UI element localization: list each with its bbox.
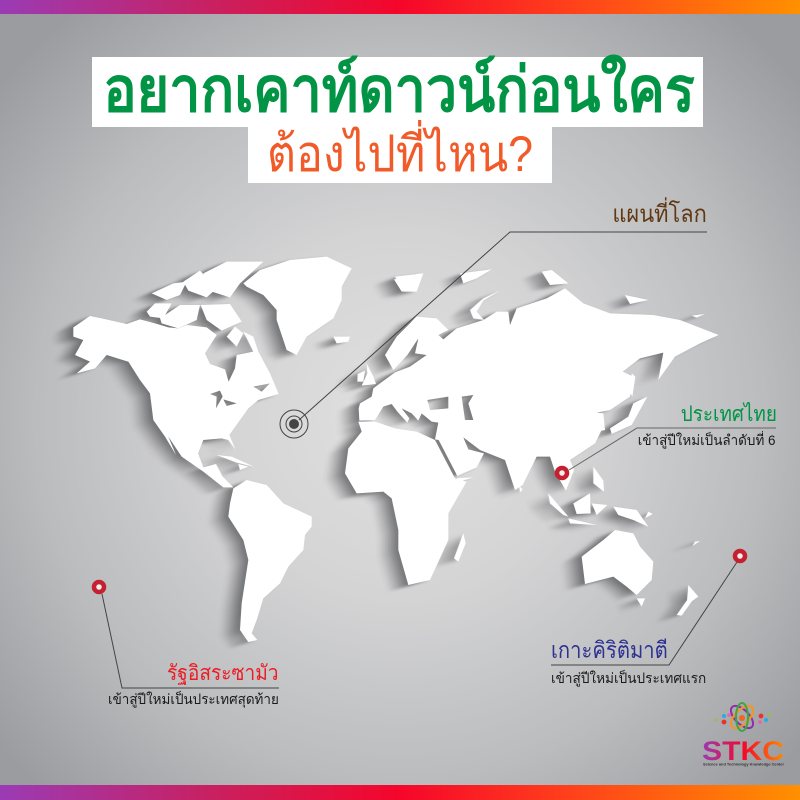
Kiritimati pin bbox=[735, 551, 745, 561]
subtitle text: ต้องไปที่ไหน? bbox=[267, 126, 533, 182]
Thailand pin bbox=[557, 468, 567, 478]
Kiritimati callout line bbox=[551, 562, 737, 665]
world map callout line bbox=[299, 232, 707, 420]
logo atom icon bbox=[714, 702, 770, 732]
bottom gradient bar bbox=[0, 785, 800, 800]
white land masses bbox=[73, 257, 719, 642]
label: world map: แผนที่โลก bbox=[612, 201, 707, 228]
text: Thailand note: เข้าสู่ปีใหม่เป็นลำดับที่ 6 bbox=[638, 432, 776, 448]
title text: อยากเคาท์ดาวน์ก่อนใคร bbox=[103, 56, 695, 125]
text: Samoa note: เข้าสู่ปีใหม่เป็นประเทศสุดท้าย bbox=[108, 691, 279, 707]
map long shadow bbox=[52, 258, 716, 649]
Samoa pin bbox=[94, 582, 104, 592]
top gradient bar bbox=[0, 0, 800, 14]
label: Kiritimati: เกาะคิริติมาตี bbox=[551, 637, 668, 663]
title box line 1 bbox=[92, 57, 703, 127]
title box line 2 bbox=[248, 127, 552, 183]
logo wordmark: STKC bbox=[702, 736, 784, 766]
label: Thailand: ประเทศไทย bbox=[681, 403, 777, 426]
label: Samoa: รัฐอิสระซามัว bbox=[167, 662, 279, 685]
target marker bbox=[280, 410, 308, 438]
Thailand callout line bbox=[569, 428, 776, 470]
logo tagline: Science and Technology Knowledge Center bbox=[703, 762, 785, 766]
text: Kiritimati note: เข้าสู่ปีใหม่เป็นประเทศแรก bbox=[551, 670, 706, 686]
Samoa callout line bbox=[102, 594, 279, 688]
